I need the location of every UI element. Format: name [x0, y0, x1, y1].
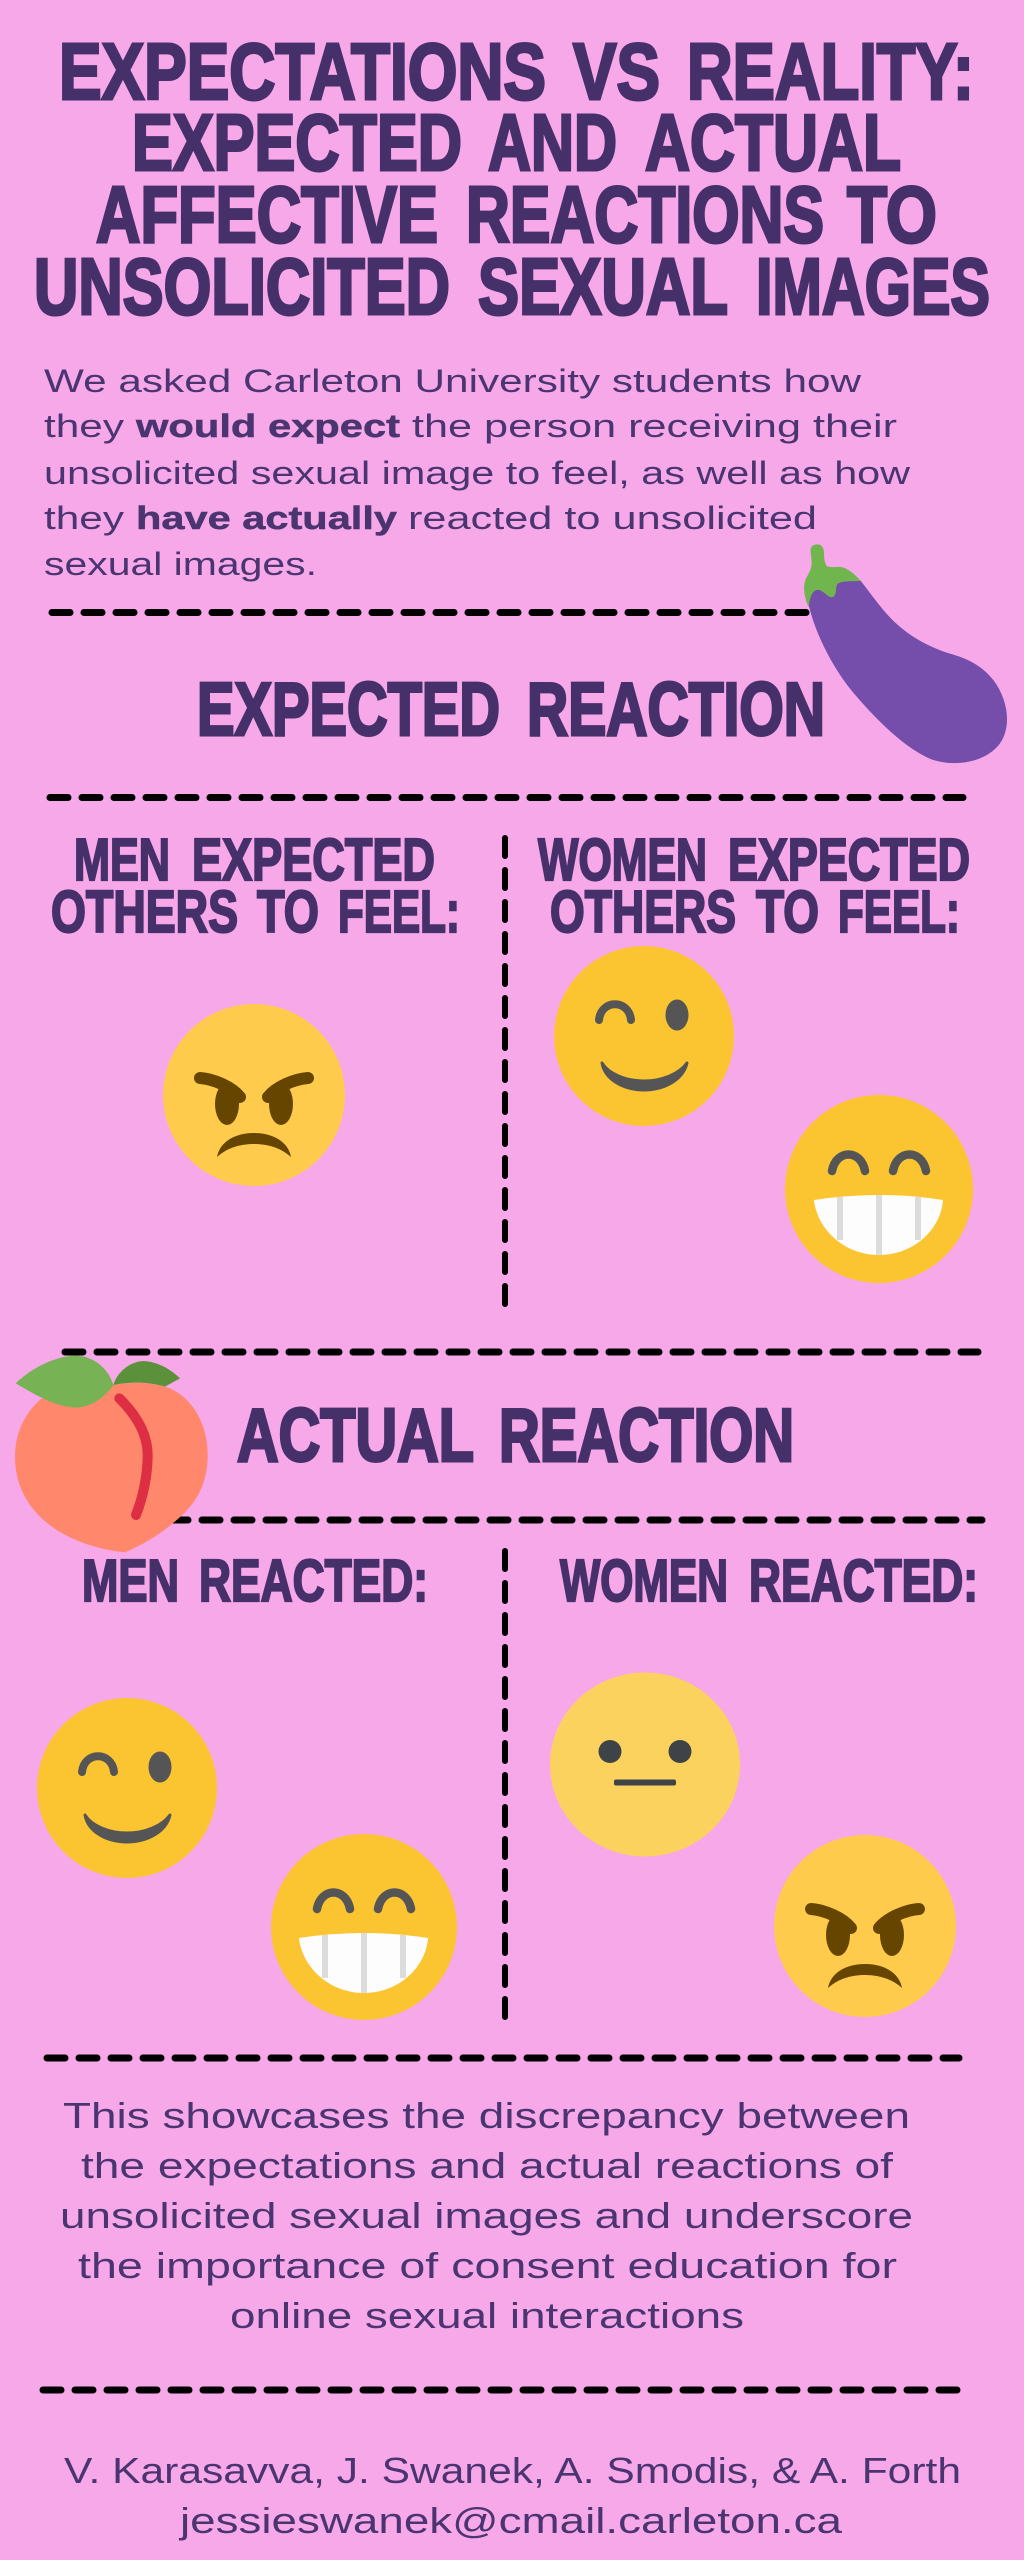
intro text block: reacted to unsolicited [408, 500, 817, 536]
heading: men expected others to feel: TO [257, 879, 319, 945]
icon: eggplant [804, 544, 1007, 763]
icon: winking smile (men reacted) [37, 1698, 217, 1878]
heading: men expected others to feel: EXPECTED [192, 827, 435, 893]
heading: expected reaction: REACTION [527, 667, 825, 751]
heading: men expected others to feel: OTHERS [51, 879, 238, 945]
conclusion text block: the expectations and actual reactions of [81, 2145, 894, 2186]
intro text block: have actually [136, 500, 397, 536]
title: AND [488, 98, 617, 187]
title: VS [573, 27, 660, 116]
conclusion text block: online sexual interactions [230, 2295, 744, 2336]
heading: actual reaction: REACTION [499, 1393, 794, 1477]
title: REACTIONS [466, 170, 824, 259]
title: AFFECTIVE [96, 170, 438, 259]
intro text block: unsolicited sexual image to feel, as well as how [44, 455, 911, 491]
heading: women expected others to feel: WOMEN [538, 827, 707, 893]
title: TO [847, 170, 937, 259]
icon: winking smile (women expected) [554, 946, 734, 1126]
credits: V. Karasavva, J. Swanek, A. Smodis, & A. Forth [64, 2450, 961, 2491]
heading: men expected others to feel: MEN [74, 827, 170, 893]
heading: actual reaction: ACTUAL [237, 1393, 474, 1477]
conclusion text block: unsolicited sexual images and underscore [60, 2195, 913, 2236]
title: EXPECTATIONS [59, 27, 546, 116]
intro text block: We asked Carleton University students how [44, 363, 862, 399]
heading: women expected others to feel: FEEL: [838, 879, 960, 945]
intro text block: sexual images. [44, 546, 317, 582]
heading: men expected others to feel [51, 827, 460, 945]
title [34, 27, 990, 331]
heading: men reacted [82, 1548, 428, 1614]
icon: grinning face (women expected) [785, 1095, 973, 1283]
icon: neutral face (women reacted) [550, 1672, 740, 1856]
title: UNSOLICITED [34, 242, 450, 331]
title: SEXUAL [478, 242, 728, 331]
heading: expected reaction: EXPECTED [197, 667, 500, 751]
conclusion text block [60, 2095, 913, 2336]
heading: men reacted: MEN [82, 1548, 179, 1614]
credits: jessieswanek@cmail.carleton.ca [179, 2500, 843, 2541]
title: ACTUAL [645, 98, 901, 187]
heading: women reacted: WOMEN [560, 1548, 728, 1614]
intro text block: the person receiving their [412, 408, 897, 444]
icon: angry face (women reacted) [774, 1835, 956, 2017]
icon: peach [15, 1356, 208, 1552]
credits [64, 2450, 961, 2541]
conclusion text block: the importance of consent education for [78, 2245, 897, 2286]
intro text block [44, 363, 911, 582]
heading: women expected others to feel: TO [756, 879, 819, 945]
heading: men reacted: REACTED: [199, 1548, 428, 1614]
heading: women expected others to feel: OTHERS [550, 879, 736, 945]
title: EXPECTED [132, 98, 462, 187]
heading: actual reaction [237, 1393, 794, 1477]
icon: grinning face (men reacted) [271, 1834, 457, 2020]
intro text block: would expect [135, 408, 400, 444]
heading: expected reaction [197, 667, 825, 751]
intro text block: they [44, 500, 124, 536]
icon: angry face (men expected) [163, 1004, 345, 1186]
heading: women reacted [560, 1548, 978, 1614]
heading: women expected others to feel [538, 827, 970, 945]
conclusion text block: This showcases the discrepancy between [63, 2095, 910, 2136]
intro text block: they [44, 408, 124, 444]
heading: men expected others to feel: FEEL: [338, 879, 460, 945]
